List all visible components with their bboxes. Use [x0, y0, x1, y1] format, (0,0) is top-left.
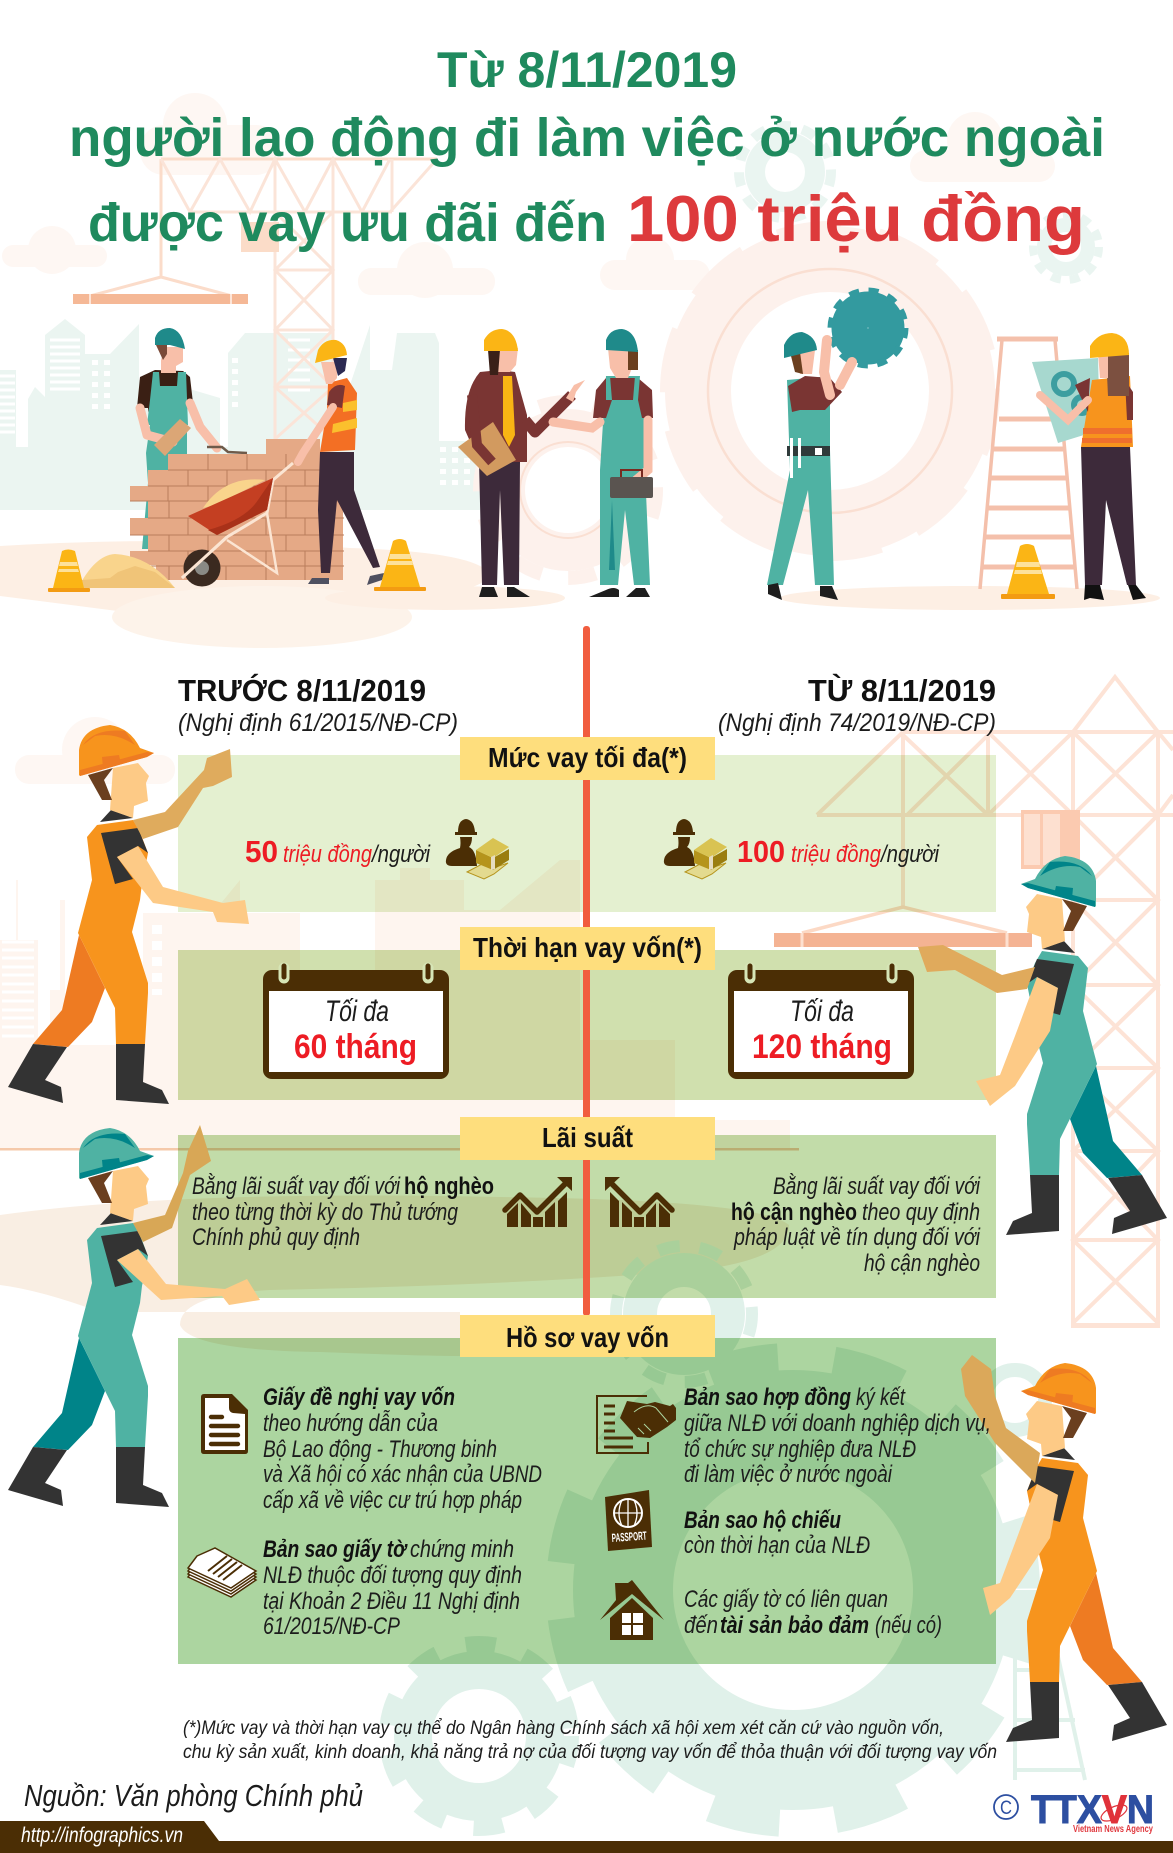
text: documents right column: còn thời hạn của NLĐ: [684, 1532, 870, 1559]
background: lower ladder: [1015, 1620, 1085, 1780]
background: crane block: [241, 222, 279, 252]
tag: documents: [460, 1315, 715, 1357]
background: right crane: [802, 677, 1173, 1326]
center divider: [583, 626, 590, 1316]
title: được vay ưu đãi đến: [88, 193, 607, 253]
figure: mason worker: [137, 328, 247, 549]
heading: right column: [718, 672, 996, 737]
text: documents left column: Giấy đề nghị vay vốn: [263, 1384, 455, 1411]
calendar: 60 months: 60 tháng: [294, 1028, 417, 1066]
text: interest right: pháp luật về tín dụng đối với: [733, 1224, 981, 1251]
amount: 50 million: 50: [245, 834, 278, 869]
text: interest right: Bằng lãi suất vay đối với: [773, 1173, 981, 1200]
amount: 100 million: triệu đồng: [791, 841, 882, 868]
background: lower city: [0, 860, 790, 1149]
icon: document: [201, 1394, 248, 1454]
text: documents right column: [684, 1384, 991, 1639]
title: người lao động đi làm việc ở nước ngoài: [69, 108, 1105, 168]
calendar: 120 months: 120 tháng: [752, 1028, 892, 1066]
text: documents right column: đi làm việc ở nước ngoài: [684, 1461, 893, 1488]
background: crane block: [1021, 810, 1080, 869]
icon: cone right: [1001, 544, 1055, 599]
figure: ladder: [980, 339, 1077, 589]
figure: big worker teal mid-left: [8, 1125, 260, 1507]
text: documents right column: tài sản bảo đảm: [720, 1612, 869, 1639]
text: interest right: hộ cận nghèo: [731, 1199, 857, 1226]
icon: house: [600, 1580, 664, 1640]
text: documents left column: theo hướng dẫn của: [263, 1409, 438, 1437]
text: documents left column: tại Khoản 2 Điều 11 Nghị định: [263, 1588, 520, 1615]
icon: worker and money left: [446, 819, 509, 879]
heading: left column: [178, 672, 458, 737]
figure: woman with blueprint: [1032, 333, 1146, 600]
heading: right column: (Nghị định 74/2019/NĐ-CP): [718, 709, 996, 737]
calendar: 60 months: [263, 966, 449, 1079]
footer bar: [0, 1821, 1173, 1853]
text: documents left column: Bộ Lao động - Thương binh: [263, 1436, 497, 1463]
icon: worker and money right: [664, 819, 727, 879]
amount: 100 million: /người: [879, 841, 940, 868]
footnote: [183, 1717, 997, 1763]
text: documents left column: và Xã hội có xác nhận của UBND: [263, 1461, 542, 1488]
text: documents left column: 61/2015/NĐ-CP: [263, 1613, 400, 1640]
title: Từ 8/11/2019: [437, 42, 737, 98]
panel: maximum loan: [178, 755, 996, 912]
amount: 100 million: 100: [737, 834, 785, 869]
footer bar: http://infographics.vn: [21, 1824, 183, 1847]
icon: cone middle: [374, 539, 426, 591]
calendar: 60 months: Tối đa: [325, 995, 389, 1028]
heading: right column: TỪ 8/11/2019: [808, 672, 996, 708]
icon: teal gear: [831, 291, 905, 365]
title: [69, 42, 1105, 255]
heading: left column: (Nghị định 61/2015/NĐ-CP): [178, 709, 458, 737]
amount: 100 million: [737, 834, 940, 869]
tag: documents: Hồ sơ vay vốn: [506, 1322, 669, 1353]
text: interest left: [192, 1173, 494, 1251]
source: Nguồn: Văn phòng Chính phủ: [24, 1778, 363, 1813]
background: crane plank: [774, 933, 1032, 947]
icon: paper stack: [188, 1548, 256, 1597]
text: documents right column: ký kết: [856, 1384, 906, 1411]
background: cloud behind helmet: [15, 717, 175, 784]
amount: 50 million: triệu đồng: [283, 841, 373, 868]
text: documents right column: Các giấy tờ có liên quan: [684, 1586, 888, 1613]
tag: loan term: [460, 927, 715, 970]
figure: worker with toolbox: [553, 329, 653, 597]
text: documents left column: chứng minh: [410, 1536, 514, 1563]
icon: sand heap: [78, 554, 175, 588]
tag: maximum loan: Mức vay tối đa(*): [488, 742, 687, 773]
tag: interest: [460, 1117, 715, 1160]
amount: 50 million: /người: [370, 841, 431, 868]
tag: maximum loan: [460, 737, 715, 780]
icon: cone left: [48, 550, 90, 592]
background: header crane: [90, 159, 437, 439]
text: documents left column: [263, 1384, 542, 1640]
text: interest left: Bằng lãi suất vay đối với: [192, 1173, 401, 1200]
panel: documents: [178, 1338, 996, 1664]
calendar: 120 months: [728, 966, 914, 1079]
logo: TTXVN: C: [1000, 1798, 1012, 1819]
background: small peach gear: [480, 402, 656, 578]
icon: chart up: [505, 1177, 572, 1227]
figure: worker with wheelbarrow: [298, 340, 384, 585]
text: documents right column: Bản sao hộ chiếu: [684, 1507, 841, 1534]
background: header clouds: [2, 93, 1055, 298]
background: small green gears: [739, 126, 1099, 280]
tag: loan term: Thời hạn vay vốn(*): [473, 932, 702, 963]
background: lower gears: [387, 1246, 1045, 1828]
logo: TTXVN: TTXVN: [1031, 1788, 1154, 1832]
figure: worker holding gear: [767, 332, 852, 600]
background: ground shapes: [0, 541, 1160, 648]
text: interest left: Chính phủ quy định: [192, 1224, 360, 1251]
icon: passport: [605, 1490, 652, 1551]
footnote: (*)Mức vay và thời hạn vay cụ thể do Ngân hàng Chính sách xã hội xem xét căn cứ vào nguồn vốn,: [183, 1717, 944, 1739]
text: interest left: theo từng thời kỳ do Thủ tướng: [192, 1199, 459, 1226]
footnote: chu kỳ sản xuất, kinh doanh, khả năng trả nợ của đối tượng vay vốn để thỏa thuận với đối tượng vay vốn: [183, 1741, 997, 1763]
text: interest right: [731, 1173, 981, 1277]
background: peach line: [0, 1148, 799, 1150]
background: ground under panels: [0, 1195, 789, 1356]
text: interest left: hộ nghèo: [404, 1173, 494, 1200]
heading: left column: TRƯỚC 8/11/2019: [178, 672, 426, 708]
panel: loan term: [178, 950, 996, 1100]
text: documents left column: cấp xã về việc cư trú hợp pháp: [263, 1487, 522, 1514]
background: big gear: [672, 233, 988, 549]
text: documents right column: Bản sao hợp đồng: [684, 1384, 851, 1411]
figure: brick wall: [130, 439, 344, 580]
figure: wheelbarrow: [182, 463, 293, 586]
title: 100 triệu đồng: [627, 182, 1085, 255]
background: city skyline: [0, 319, 480, 510]
icon: chart down: [605, 1177, 672, 1227]
panel: interest rate: [178, 1135, 996, 1298]
text: documents right column: giữa NLĐ với doanh nghiệp dịch vụ,: [684, 1410, 991, 1437]
figure: big worker orange bottom-right: [961, 1355, 1167, 1742]
text: documents right column: (nếu có): [875, 1612, 942, 1639]
figure: big worker orange top-left: [8, 725, 249, 1104]
text: interest right: hộ cận nghèo: [864, 1250, 980, 1277]
text: interest right: theo quy định: [862, 1199, 980, 1226]
tag: interest: Lãi suất: [542, 1122, 633, 1153]
text: documents left column: NLĐ thuộc đối tượng quy định: [263, 1562, 522, 1589]
figure: manager: [458, 329, 585, 597]
background: crane plank: [73, 294, 248, 304]
text: documents right column: đến: [684, 1612, 718, 1639]
icon: passport: PASSPORT: [611, 1529, 647, 1545]
text: documents left column: Bản sao giấy tờ: [263, 1536, 408, 1563]
calendar: 120 months: Tối đa: [790, 995, 854, 1028]
icon: handshake contract: [597, 1396, 676, 1453]
amount: 50 million: [245, 834, 431, 869]
text: documents right column: tổ chức sự nghiệp đưa NLĐ: [684, 1436, 916, 1463]
figure: big worker teal right: [918, 856, 1167, 1235]
